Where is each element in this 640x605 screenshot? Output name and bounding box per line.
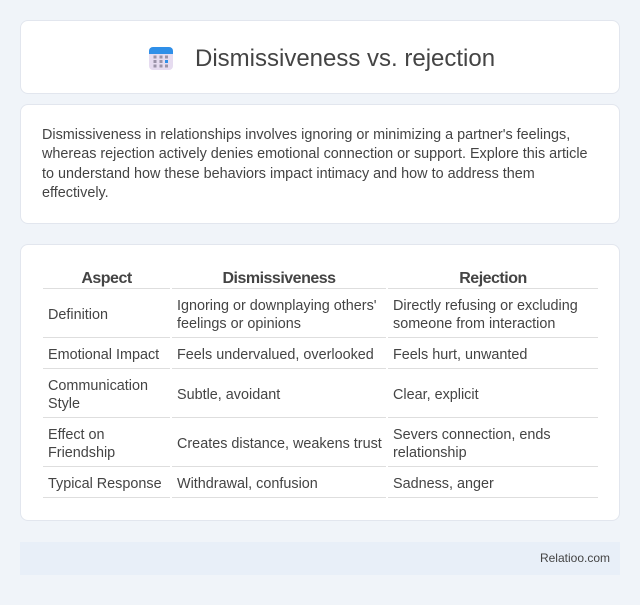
row: effect on friendship: Effect on [48,427,105,443]
row: definition: Ignoring or downplaying others' [177,298,377,314]
row: communication style: Style [48,396,80,412]
row: definition: someone from interaction [393,316,555,332]
row: definition: Directly refusing or excluding [393,298,578,314]
table header [81,270,527,287]
intro text: effectively. [42,185,109,201]
panel: introduction [20,104,620,224]
row: emotional impact: Emotional Impact [48,347,159,363]
table header: Aspect [81,270,132,287]
row: typical response: Withdrawal, confusion [177,476,318,492]
row: effect on friendship [48,427,551,461]
row: effect on friendship: Creates distance, weakens trust [177,436,382,452]
comparison table [43,270,598,498]
row: definition: feelings or opinions [177,316,301,332]
intro text: to understand how these behaviors impact intimacy and how to address them [42,166,535,182]
row: communication style: Communication [48,378,148,394]
intro text: Dismissiveness in relationships involves ignoring or minimizing a partner's feelings, [42,127,570,143]
row: effect on friendship: Severs connection, ends [393,427,551,443]
panel: comparison table [20,244,620,521]
table header: Dismissiveness [222,270,336,287]
intro text: whereas rejection actively denies emotional connection or support. Explore this article [42,146,588,162]
row: communication style [48,378,479,412]
icon: calendar [149,47,173,70]
row: effect on friendship: relationship [393,445,467,461]
row: definition: Definition [48,307,108,323]
row: effect on friendship: Friendship [48,445,115,461]
row: typical response: Typical Response [48,476,162,492]
title: Dismissiveness vs. rejection [195,45,495,72]
row: typical response: Sadness, anger [393,476,494,492]
row: definition [48,298,578,332]
intro text [42,127,588,201]
row: emotional impact: Feels undervalued, overlooked [177,347,374,363]
footer text: Relatioo.com [540,551,610,565]
row: emotional impact: Feels hurt, unwanted [393,347,527,363]
row: typical response [48,476,494,492]
row: communication style: Subtle, avoidant [177,387,280,403]
row: emotional impact [48,347,527,363]
table header: Rejection [459,270,527,287]
row: communication style: Clear, explicit [393,387,479,403]
footer bar [20,542,620,575]
panel: title card [20,20,620,94]
